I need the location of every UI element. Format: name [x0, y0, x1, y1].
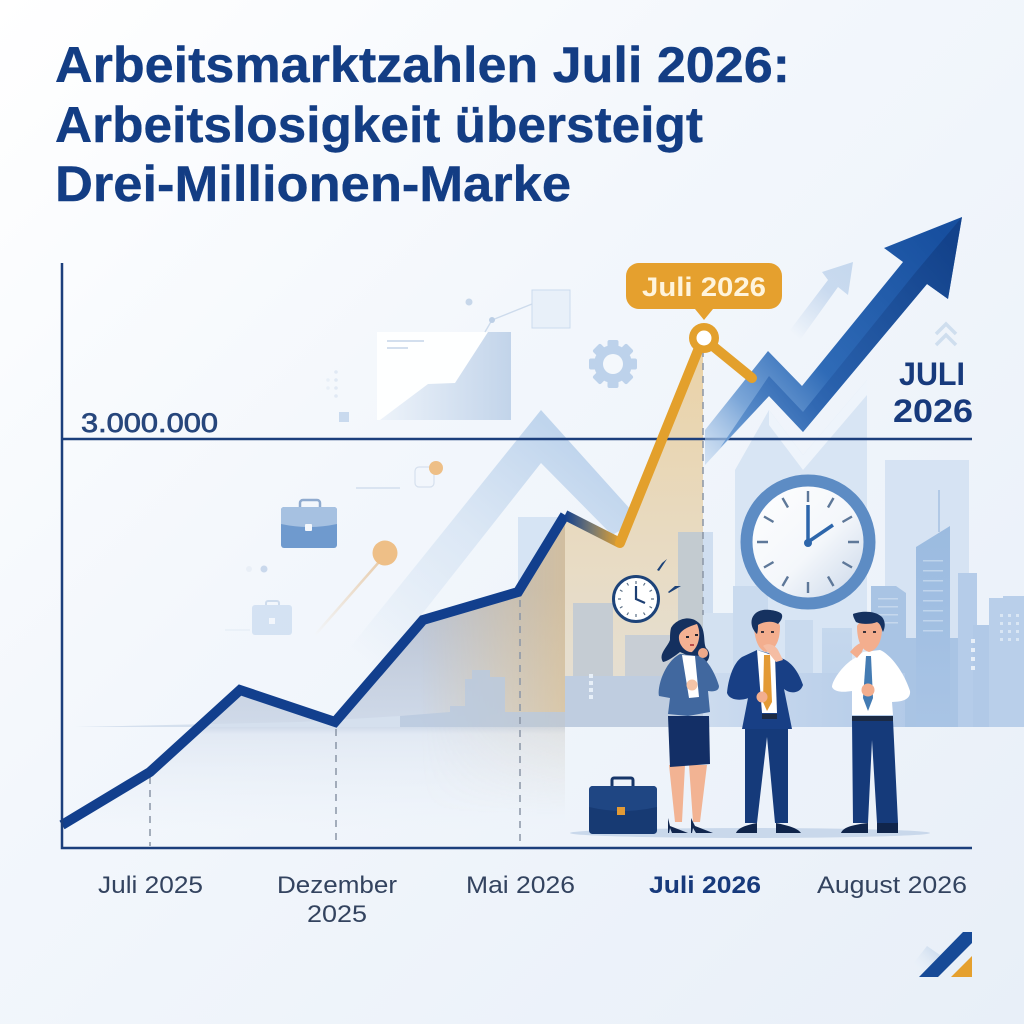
guide lines: [150, 350, 703, 846]
blouse: [682, 655, 699, 698]
hands: [698, 648, 708, 658]
side label: 2026: [893, 393, 973, 429]
jacket: [727, 650, 803, 729]
small square and dots: [326, 370, 349, 422]
belt: [762, 714, 777, 719]
area under line: [82, 524, 565, 783]
blue rising arrow: [705, 217, 962, 465]
threshold line: [62, 438, 972, 440]
jacket: [659, 654, 719, 716]
shoes: [841, 823, 898, 833]
icon: small faded briefcase: [225, 601, 292, 635]
buildings: [565, 460, 1024, 727]
axis labels: [98, 872, 967, 928]
icon: gear: [589, 340, 637, 388]
callout: [626, 263, 782, 320]
head: [857, 620, 882, 652]
skirt: [668, 716, 710, 767]
hair: [751, 610, 782, 634]
skyline: [340, 338, 1024, 727]
eyes: [761, 631, 774, 633]
head: [754, 618, 780, 652]
legs: [669, 765, 707, 822]
chart card: [377, 332, 511, 420]
marker: [689, 323, 719, 353]
axis labels: August 2026: [817, 872, 967, 899]
side label: [893, 356, 973, 429]
floor shadow: [570, 828, 930, 838]
axis labels: 2025: [307, 901, 367, 928]
shirt: [832, 650, 910, 715]
eyes: [863, 631, 876, 633]
face: [679, 624, 699, 652]
person: man right: [832, 612, 910, 833]
main line: [62, 338, 752, 825]
title: Drei-Millionen-Marke: [55, 156, 571, 212]
axis labels: Juli 2026: [649, 872, 761, 899]
dots: [246, 566, 268, 572]
icon: small clock: [614, 559, 681, 622]
background decorations: [225, 262, 956, 635]
person: man centre: [727, 610, 803, 833]
axis labels: Juli 2025: [98, 872, 203, 899]
trousers: [852, 720, 898, 823]
belt: [852, 716, 893, 721]
tan highlight area: [565, 338, 703, 727]
title: Arbeitslosigkeit übersteigt: [55, 97, 703, 153]
trousers: [745, 727, 788, 823]
axis labels: Mai 2026: [466, 872, 575, 899]
logo: [908, 932, 972, 977]
hair: [853, 612, 885, 632]
threshold label: 3.000.000: [81, 408, 218, 438]
title: [55, 37, 790, 212]
icon: navy briefcase: [589, 778, 657, 834]
title: Arbeitsmarktzahlen Juli 2026:: [55, 37, 790, 93]
axis labels: Dezember: [277, 872, 397, 899]
icon: large clock: [746, 480, 870, 604]
shoes: [736, 823, 801, 833]
pale mountain shapes: [340, 380, 867, 727]
tie: [863, 656, 873, 711]
shirt: [757, 650, 777, 713]
icon: chevrons: [936, 324, 956, 345]
callout: Juli 2026: [642, 272, 766, 302]
hands: [763, 644, 783, 662]
hands: [850, 643, 865, 658]
building windows: [589, 560, 1019, 699]
connected square node: [466, 290, 570, 332]
hair: [662, 618, 709, 663]
side label: JULI: [899, 356, 965, 392]
orange node: [356, 461, 443, 488]
icon: orange pin: [315, 540, 398, 635]
icon: light arrow: [790, 262, 853, 340]
tie: [763, 655, 772, 711]
shoes: [668, 818, 713, 833]
person: woman: [659, 618, 719, 833]
icon: briefcase: [281, 500, 337, 548]
axes: [62, 263, 972, 848]
